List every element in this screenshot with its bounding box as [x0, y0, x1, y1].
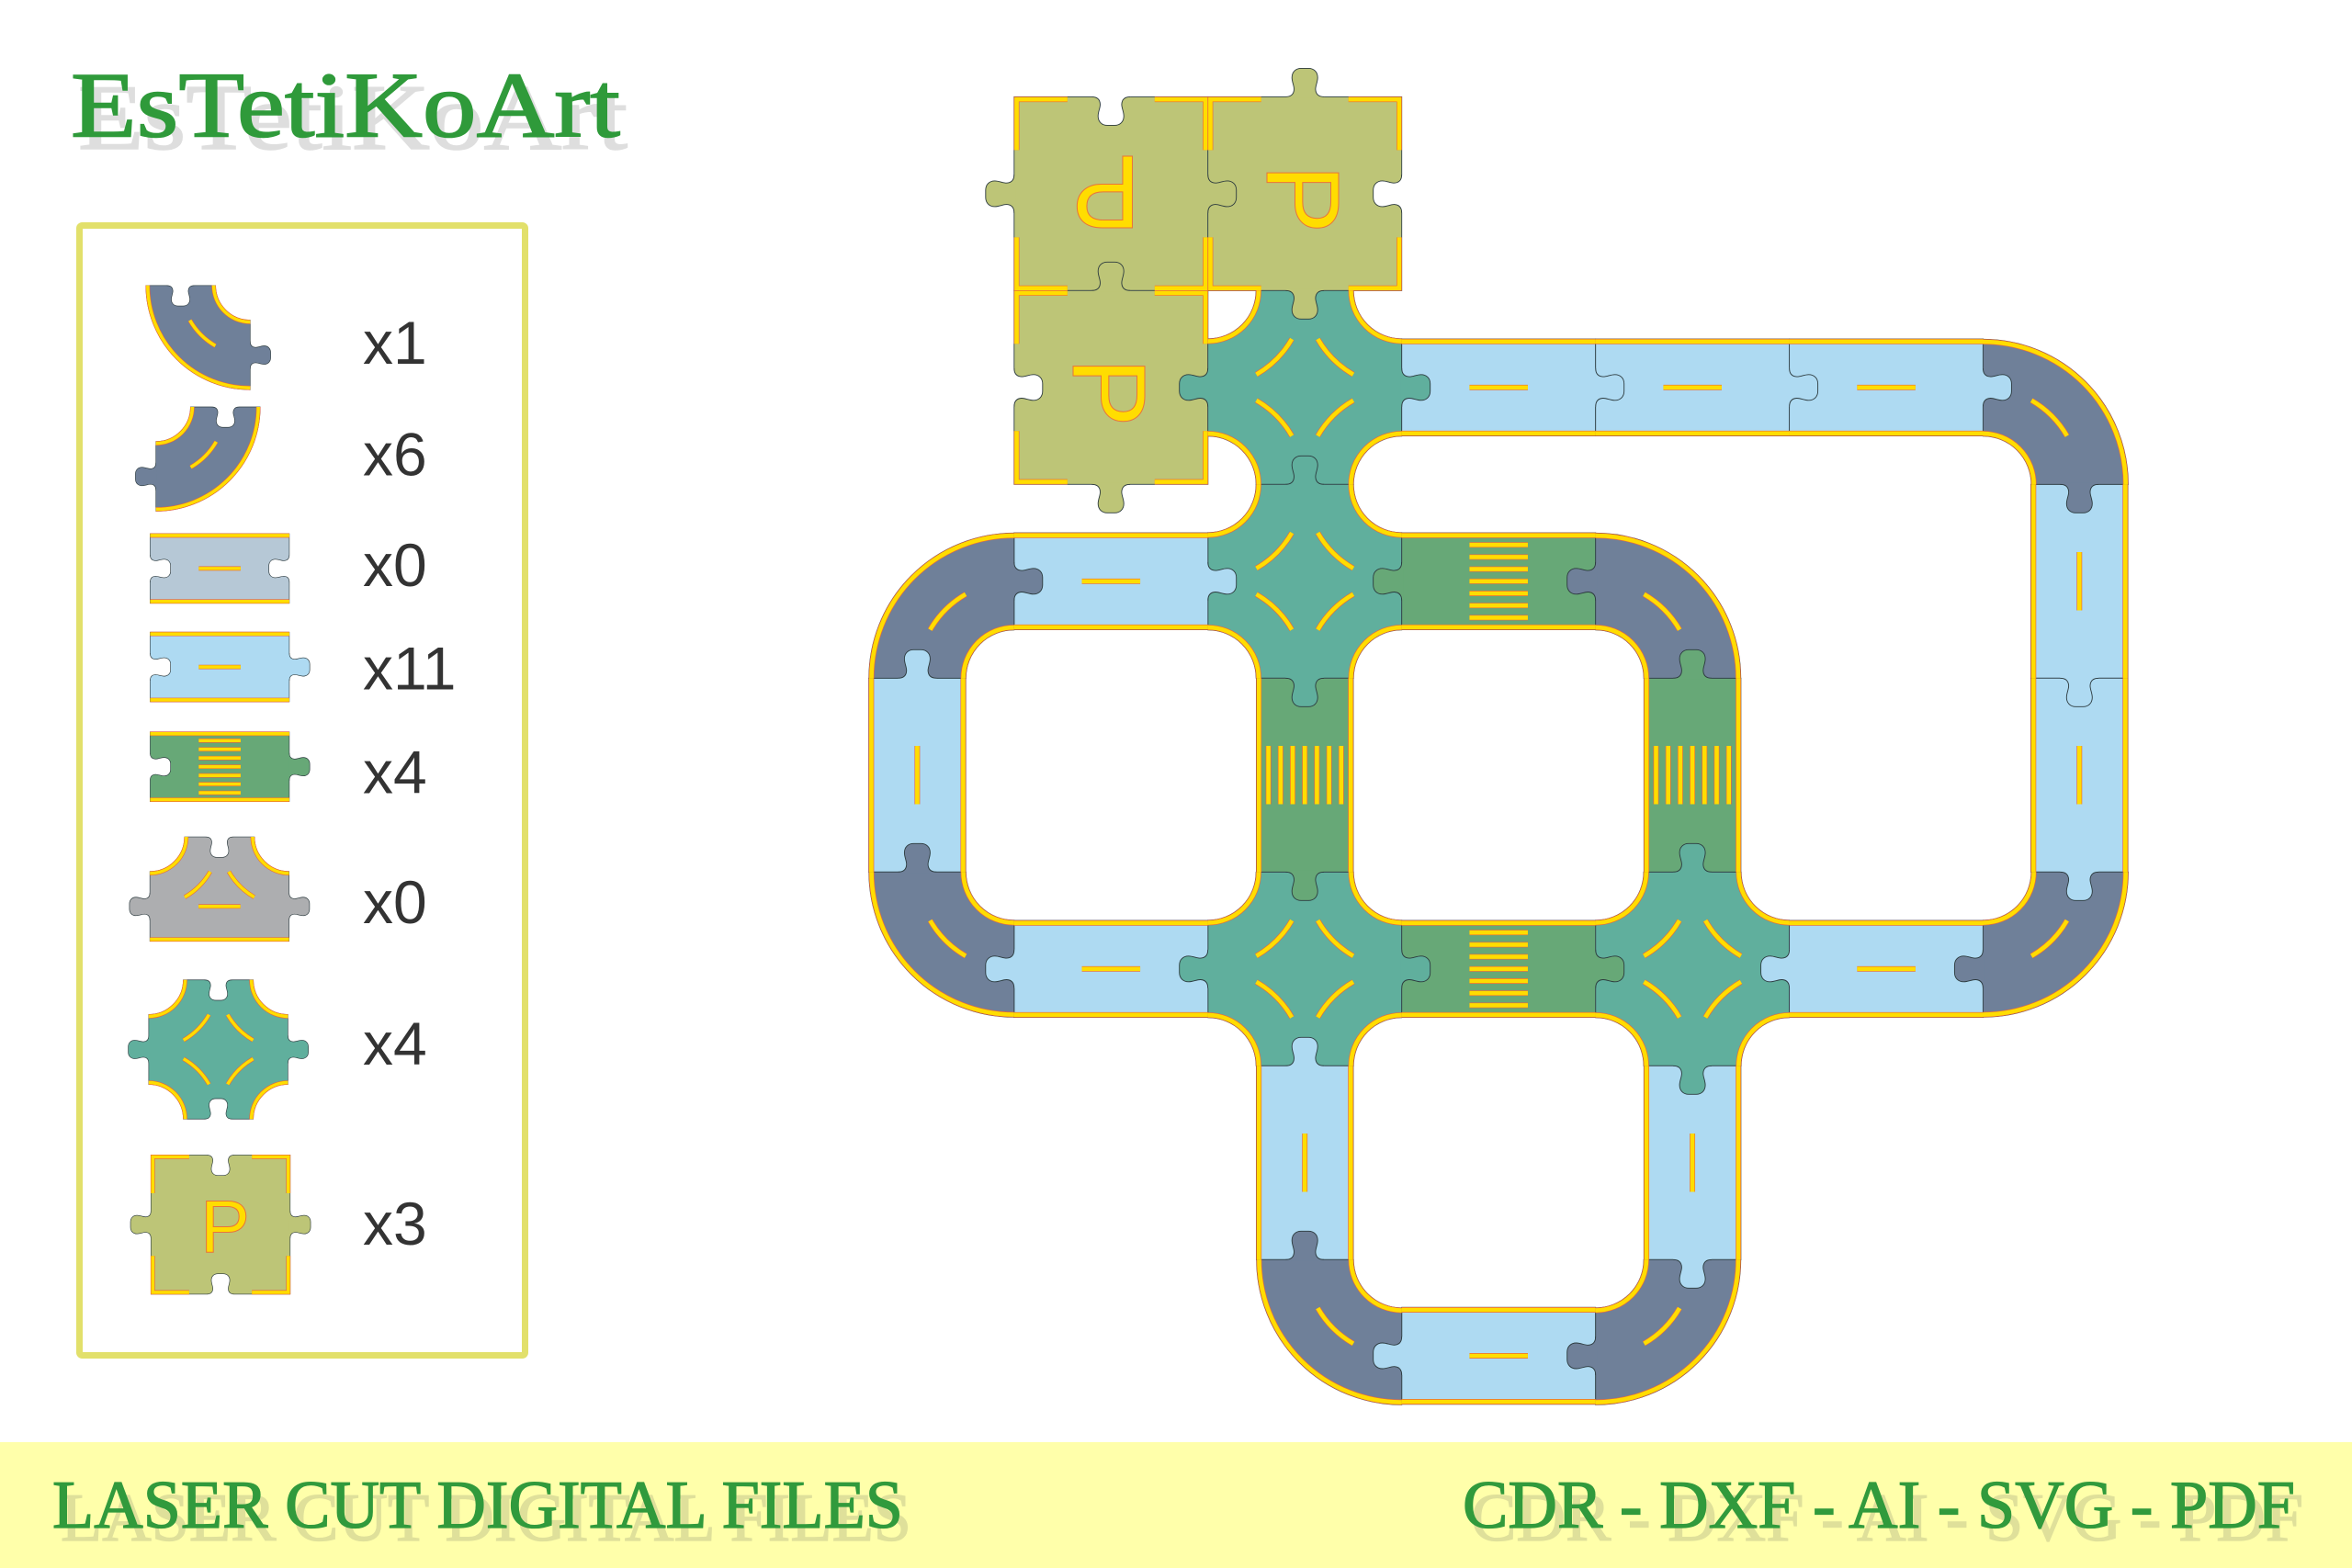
- legend item: cross junction, count x4: [129, 979, 427, 1120]
- straight road vertical right 2: [2031, 678, 2128, 872]
- legend item: grey straight road, count x0: x0: [363, 531, 427, 599]
- parking tile 1: [1014, 96, 1208, 290]
- legend item: curve right, count x6: x6: [363, 421, 427, 489]
- panel: parts legend: [79, 226, 526, 1356]
- junction 4: [1596, 872, 1790, 1066]
- legend item: parking tile, count x3: x3: [363, 1190, 427, 1258]
- footer text left: LASER CUT DIGITAL FILES: LASER CUT DIGITAL FILES: [61, 1481, 911, 1556]
- puzzle connector tabs and notches: [898, 68, 2098, 1375]
- straight road vertical left: [869, 678, 966, 872]
- footer text right: file formats: CDR - DXF - AI - SVG - PDF: [1471, 1481, 2303, 1556]
- crosswalk horizontal lower: [1402, 920, 1596, 1018]
- junction 1: [1208, 290, 1402, 484]
- curve bottom left: [1257, 1259, 1402, 1404]
- junction 2: [1208, 484, 1402, 678]
- legend item: crosswalk, count x4: x4: [363, 738, 427, 806]
- legend item: curve right, count x6: [135, 406, 427, 511]
- crosswalk horizontal upper: [1402, 533, 1596, 630]
- tile bases: [869, 96, 2128, 1404]
- crosswalk vertical A: [1256, 678, 1353, 872]
- title: EsTetiKoArt: EsTetiKoArt: [78, 66, 628, 170]
- parking letter on tile 2: P: [1245, 164, 1361, 233]
- legend item: curve left, count x1: x1: [363, 309, 427, 377]
- straight road right lower: [1790, 920, 1984, 1018]
- curve left upper: [869, 533, 1014, 678]
- road markings: red outline: [871, 99, 2126, 1403]
- parking letter on tile 3: P: [1051, 357, 1167, 427]
- footer text left: LASER CUT DIGITAL FILES: LASER CUT DIGITAL FILES: [52, 1468, 903, 1543]
- curve middle top: [1596, 533, 1741, 678]
- straight road bottom: [1402, 1307, 1596, 1404]
- straight road top 2: [1596, 339, 1790, 436]
- junction 3: [1208, 872, 1402, 1066]
- legend item: blue straight road, count x11: [149, 632, 457, 703]
- legend item: parking tile, count x3: [130, 1154, 427, 1295]
- legend item: crosswalk, count x4: [149, 732, 427, 806]
- road layout: [869, 68, 2128, 1404]
- straight road vertical lower B: [1644, 1066, 1741, 1259]
- curve bottom right: [1596, 1259, 1741, 1404]
- straight road vertical lower A: [1256, 1066, 1353, 1259]
- parking tile 2: [1208, 96, 1402, 290]
- legend item: grey straight road, count x0: [149, 531, 427, 604]
- road markings: yellow lines: [871, 99, 2126, 1403]
- legend frame: [79, 226, 526, 1356]
- title: EsTetiKoArt: EsTetiKoArt: [71, 53, 620, 158]
- parking letter on tile 1: P: [1071, 134, 1141, 250]
- legend item: curve left, count x1: [146, 285, 427, 389]
- straight road vertical right 1: [2031, 484, 2128, 678]
- legend item: blue straight road, count x11: x11: [363, 635, 457, 703]
- straight road left upper: [1014, 533, 1208, 630]
- straight road left lower: [1014, 920, 1208, 1018]
- footer band: [0, 1442, 2352, 1568]
- footer text right: file formats: CDR - DXF - AI - SVG - PDF: [1463, 1468, 2295, 1543]
- legend item: T junction, count x0: [130, 836, 427, 942]
- parking tile 3: [1014, 290, 1208, 484]
- curve right lower: [1983, 872, 2128, 1017]
- legend item: T junction, count x0: x0: [363, 868, 427, 936]
- straight road top 1: [1402, 339, 1596, 436]
- legend item: cross junction, count x4: x4: [363, 1010, 427, 1077]
- curve top right: [1983, 339, 2128, 484]
- legend item: parking tile, count x3: P: [200, 1186, 250, 1269]
- curve left lower: [869, 872, 1014, 1017]
- straight road top 3: [1790, 339, 1984, 436]
- crosswalk vertical B: [1644, 678, 1741, 872]
